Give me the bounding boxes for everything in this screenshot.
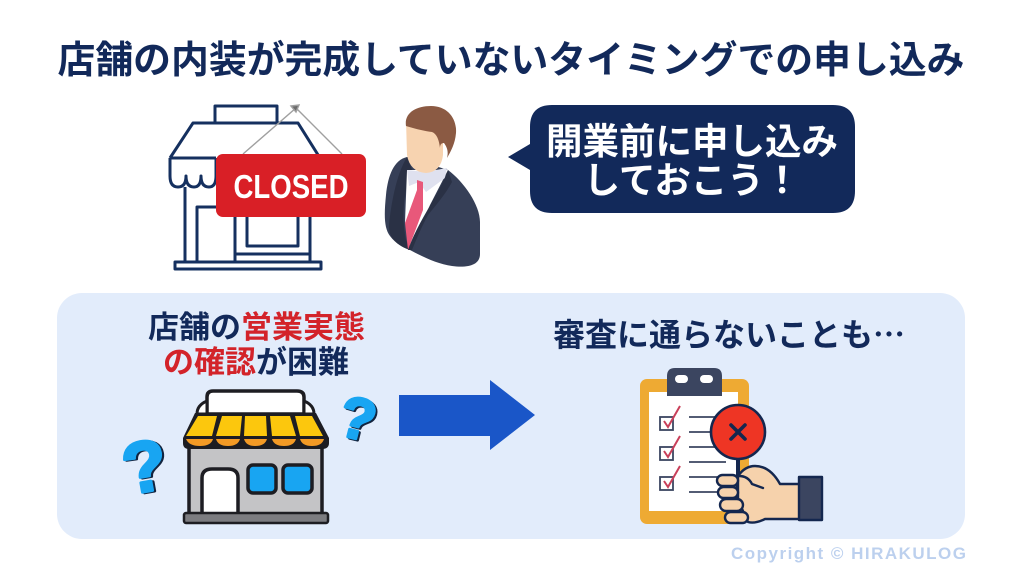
head xyxy=(406,120,443,173)
icon: question mark right: ? xyxy=(333,383,383,455)
hair xyxy=(406,106,456,158)
text: store confirmation difficulty: 店舗の営業実態 xyxy=(148,310,365,345)
closed sign: CLOSED xyxy=(234,168,348,205)
arrow xyxy=(399,380,535,450)
suit xyxy=(385,157,480,267)
icon: question mark left: ? xyxy=(118,425,176,511)
title: 店舗の内装が完成していないタイミングでの申し込み xyxy=(58,40,964,82)
icon: question mark right: ? xyxy=(334,385,384,456)
speech bubble xyxy=(508,105,855,213)
text: may not pass review: 審査に通らないことも… xyxy=(553,310,905,356)
shop outline xyxy=(170,106,321,269)
panel: lower section xyxy=(57,293,965,539)
checklist xyxy=(660,406,726,492)
tie xyxy=(405,180,423,250)
icon: clipboard with rejection paddle xyxy=(640,368,822,524)
copyright: Copyright © HIRAKULOG xyxy=(731,544,966,563)
icon: shop xyxy=(183,391,329,523)
right lapel xyxy=(408,170,452,250)
icon: businessman xyxy=(385,106,480,267)
speech bubble: しておこう！ xyxy=(584,160,800,201)
rejection paddle xyxy=(711,405,765,500)
icon: closed shop xyxy=(170,105,366,269)
left lapel xyxy=(389,157,412,250)
text: store confirmation difficulty: の確認が困難 xyxy=(163,345,349,380)
icon: question mark left: ? xyxy=(116,424,173,511)
text: store confirmation difficulty xyxy=(148,310,365,380)
sign hanger xyxy=(243,105,342,154)
collar xyxy=(407,168,447,192)
shirt xyxy=(405,170,448,250)
closed sign xyxy=(216,154,366,217)
speech bubble: 開業前に申し込み xyxy=(546,121,838,162)
hand xyxy=(717,466,822,523)
